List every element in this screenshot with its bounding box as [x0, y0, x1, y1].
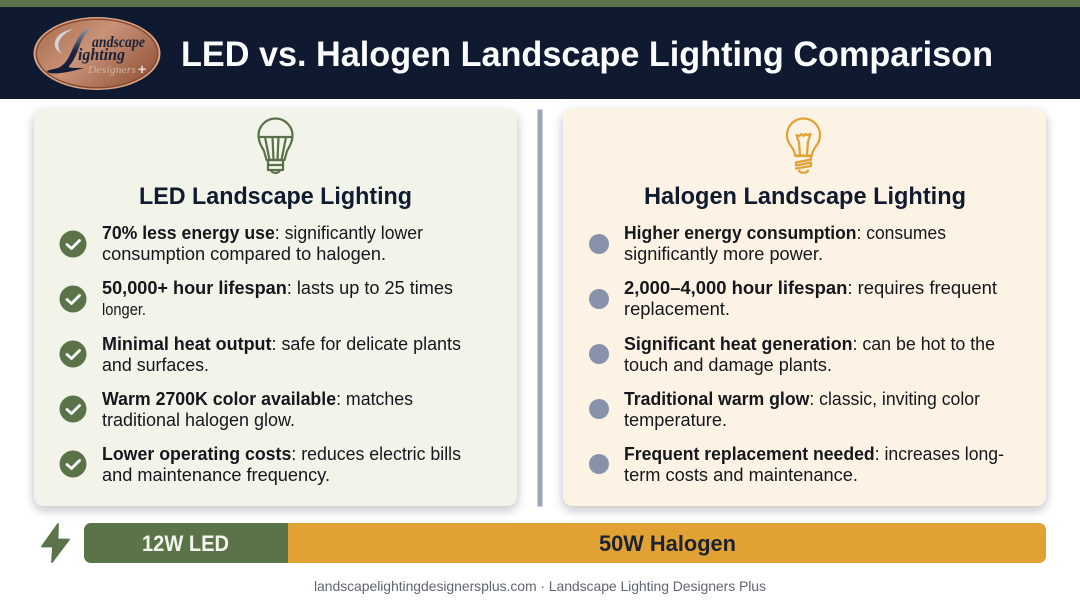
- footer: landscapelightingdesignersplus.com · Landscape Lighting Designers Plus: [314, 578, 766, 594]
- logo: andscape: [92, 34, 145, 51]
- logo: [34, 17, 160, 90]
- item: heat: Significant heat generation: can be hot to the: [624, 334, 995, 354]
- item: color: [60, 389, 413, 430]
- item: lifespan: 2,000–4,000 hour lifespan : requires frequent: [624, 278, 997, 298]
- item: energy: 70% less energy use: significantly lower: [102, 223, 423, 243]
- item: lifespan: replacement.: [624, 299, 730, 319]
- panel: LED: [34, 109, 517, 506]
- item: lifespan: longer.: [102, 301, 146, 319]
- item: heat: and surfaces.: [102, 355, 209, 375]
- heading: LED: LED Landscape Lighting: [139, 183, 412, 210]
- item: energy: consumption compared to halogen.: [102, 244, 386, 264]
- item: heat: touch and damage plants.: [624, 355, 832, 375]
- wattage comparison bar: [84, 523, 1046, 563]
- item: glow: Traditional warm glow: classic, inviting color: [624, 389, 980, 409]
- item: lifespan: 50,000+ hour lifespan: lasts up to 25 times: [102, 278, 453, 298]
- item: replacement: Frequent replacement needed: increases long-: [624, 444, 1004, 464]
- item: costs: [60, 444, 461, 485]
- icon: LED bulb: [258, 118, 292, 173]
- logo: ighting: [78, 45, 125, 64]
- center divider: [538, 110, 542, 506]
- item: costs: and maintenance frequency.: [102, 465, 330, 485]
- item: color: Warm 2700K color available: matches: [102, 389, 413, 409]
- heading: Halogen: Halogen Landscape Lighting: [644, 183, 966, 210]
- label: 50W Halogen: 50W Halogen: [599, 531, 736, 556]
- top accent bar: [0, 0, 1080, 7]
- icon: halogen bulb: [787, 118, 820, 173]
- title: LED vs. Halogen Landscape Lighting Comparison: [181, 35, 993, 74]
- item: consumption: Higher energy consumption: consumes: [624, 223, 946, 243]
- item: color: traditional halogen glow.: [102, 410, 295, 430]
- item: replacement: [589, 444, 1004, 485]
- logo: +: [138, 61, 146, 77]
- item: heat: [589, 334, 995, 375]
- item: lifespan: [589, 278, 997, 319]
- panel: Halogen: [563, 109, 1046, 506]
- item: consumption: significantly more power.: [624, 244, 823, 264]
- icon: lightning bolt: [42, 524, 69, 562]
- logo: Designers: [87, 64, 136, 76]
- item: heat: [60, 334, 461, 375]
- item: consumption: [589, 223, 946, 264]
- item: heat: Minimal heat output: safe for delicate plants: [102, 334, 461, 354]
- item: glow: [589, 389, 980, 430]
- item: glow: temperature.: [624, 410, 727, 430]
- item: costs: Lower operating costs: reduces electric bills: [102, 444, 461, 464]
- label: 12W LED: 12W LED: [142, 531, 229, 556]
- item: energy: [60, 223, 423, 264]
- item: lifespan: [60, 278, 453, 319]
- item: replacement: term costs and maintenance.: [624, 465, 858, 485]
- header band: [0, 7, 1080, 99]
